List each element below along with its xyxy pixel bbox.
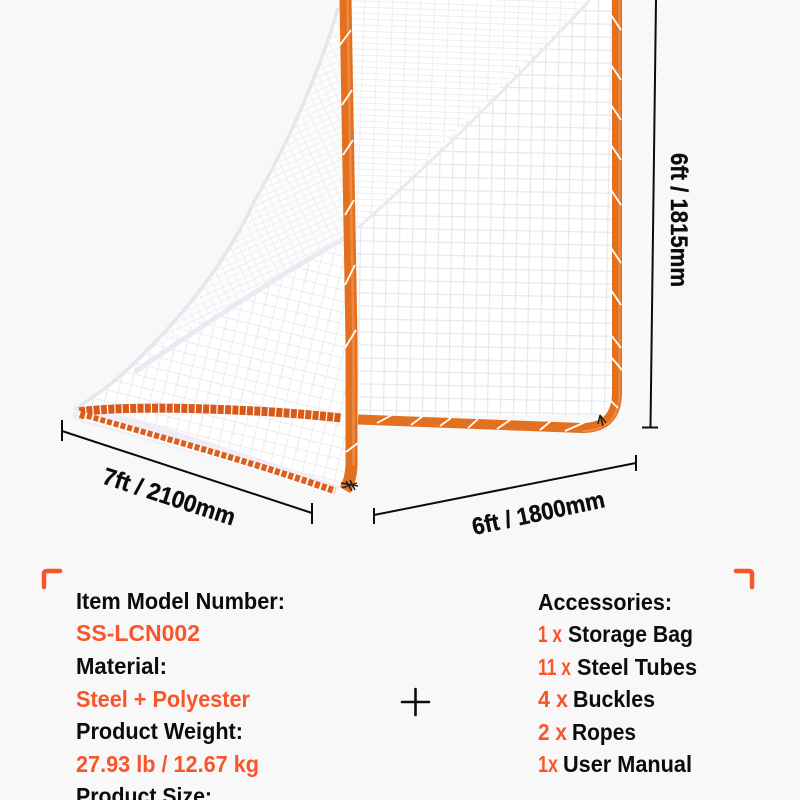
accessories list: Storage Bag [568,621,693,647]
product specifications [76,588,285,800]
accessories list: User Manual [563,751,692,777]
accessories list: Buckles [573,686,655,712]
side net panel [72,0,346,493]
product specifications: Steel + Polyester [76,686,250,712]
accessories list: Steel Tubes [577,654,697,680]
orange base rails inside net [78,408,341,494]
dimension: depth 7ft [62,420,312,531]
product specifications: SS-LCN002 [76,620,200,646]
accessories list: 1x [538,751,558,777]
dimension: height 6ft [642,0,692,428]
accessories list: Ropes [572,719,636,745]
plus icon [402,689,429,715]
accessories list: 11 x [538,654,571,680]
accessories list: 4 x [538,686,568,712]
dimension: height 6ft: 6ft / 1815mm [665,153,692,287]
product specifications: Material: [76,653,167,679]
dimension: depth 7ft: 7ft / 2100mm [99,463,239,531]
steel frame [345,0,620,490]
corner bracket right [736,571,752,587]
goal illustration [72,0,622,494]
net lashing [340,15,622,452]
accessories list: 1 x [538,621,562,647]
dimension: width 6ft [374,455,636,541]
accessories list: 2 x [538,719,567,745]
accessories list [538,589,697,777]
knots [341,415,606,491]
corner bracket left [44,571,60,587]
accessories list: Accessories: [538,589,672,615]
product specifications: Product Weight: [76,718,243,744]
back net panel [352,0,614,416]
product specifications: Item Model Number: [76,588,285,614]
dimension: width 6ft: 6ft / 1800mm [470,486,607,541]
product specifications: 27.93 lb / 12.67 kg [76,751,259,777]
